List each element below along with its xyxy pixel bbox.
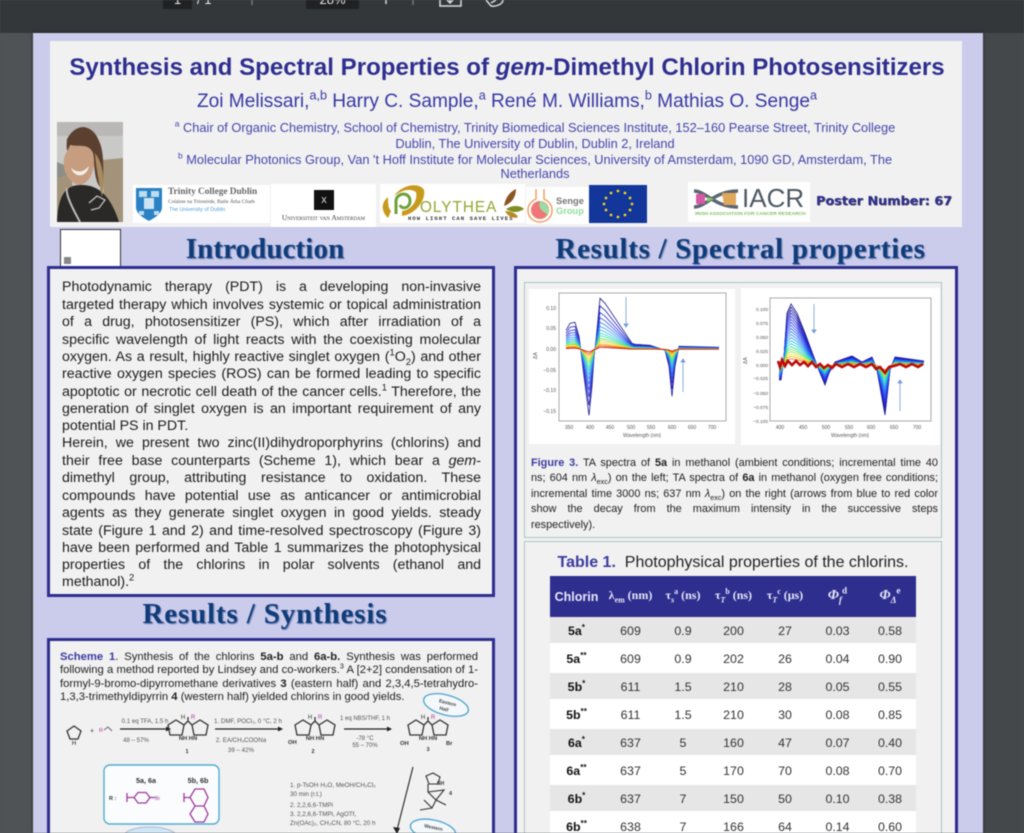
axes frame <box>770 298 931 421</box>
introduction text: Herein, we present two zinc(II)dihydroporphyrins (chlorins) and <box>62 435 481 451</box>
scheme caption: formyl-9-bromo-dipyrromethane derivatives 3 (eastern half) and 2,3,4,5-tetrahydro- <box>60 678 478 690</box>
table 1: 637 <box>620 792 641 806</box>
compound 3: 3 <box>426 747 430 753</box>
figure 3 caption: respectively). <box>531 519 595 531</box>
introduction text: specific wavelength of light reacts with the coexisting molecular <box>62 332 481 348</box>
wordmark: IACR <box>742 183 804 213</box>
y ticks <box>753 307 768 425</box>
compound 2: 2 <box>311 749 315 755</box>
introduction text: potential PS in PDT. <box>62 418 188 434</box>
table 1: 1.5 <box>674 708 692 722</box>
scheme caption <box>60 651 478 704</box>
panel: introduction <box>47 266 495 597</box>
table 1: 1.5 <box>674 680 692 694</box>
axis labels: Wavelength (nm) <box>831 433 869 439</box>
step 3 arrow: 55 – 70% <box>352 743 378 749</box>
downward arrow <box>393 767 413 833</box>
table 1: τTb (ns) <box>715 587 752 605</box>
affiliation a: a Chair of Organic Chemistry, School of Chemistry, Trinity Biomedical Sciences Institute, 152–160 Pearse Street, Trinity College <box>175 119 895 135</box>
logo: IACR <box>688 182 810 222</box>
table 1: 200 <box>723 624 744 638</box>
x ticks: 700 <box>913 425 921 431</box>
introduction text: targeted therapy which involves systemic or topical administration <box>62 297 481 313</box>
decay arrows <box>624 297 685 392</box>
reaction conditions: 2. 2,2,6,6-TMPi <box>290 802 333 809</box>
table 1: 5a* <box>568 623 585 638</box>
reaction conditions: Zn(OAc)₂, CH₃CN, 80 °C, 20 h <box>290 819 376 827</box>
table 1: 210 <box>723 680 744 694</box>
table 1: 0.40 <box>878 736 902 750</box>
compound 2: OH <box>288 740 297 746</box>
table 1: 202 <box>723 652 744 666</box>
logo: Senge Group <box>526 187 589 224</box>
compound 4: NH <box>437 781 445 787</box>
axis labels: ΔA <box>533 352 539 359</box>
table box <box>524 541 942 833</box>
western half badge <box>408 815 458 833</box>
heading: Introduction: Introduction <box>186 233 344 265</box>
introduction text: apoptotic or necrotic cell death of the cancer cells.1 Therefore, the <box>62 382 481 400</box>
pyrrole: R <box>99 728 103 734</box>
axis labels: ΔA <box>743 357 749 364</box>
crest <box>314 190 334 210</box>
table 1: 5b** <box>566 707 587 722</box>
table 1: Chlorin <box>555 590 598 604</box>
figure 3 caption <box>530 457 938 532</box>
step 2 arrow: 1. DMF, POCl₃, 0 °C, 2 h <box>214 718 283 725</box>
eastern half badge: Half <box>439 706 449 714</box>
x ticks: 700 <box>708 425 716 431</box>
y ticks: −0.100 <box>753 419 768 425</box>
title: Synthesis and Spectral Properties of gem-Dimethyl Chlorin Photosensitizers <box>69 54 945 81</box>
panel: spectral properties <box>514 266 958 833</box>
compound 1: 1 <box>185 749 189 755</box>
axis labels <box>743 357 869 439</box>
step 3 arrow <box>340 716 392 749</box>
table 1: 70 <box>778 764 792 778</box>
reaction conditions: 1. p-TsOH·H₂O, MeOH/CH₂Cl₂ <box>290 782 376 789</box>
table 1: 26 <box>778 652 792 666</box>
y ticks: 0.075 <box>756 321 768 327</box>
R substituent box: R : <box>109 796 116 802</box>
page number field <box>163 0 192 9</box>
table 1: 5b* <box>568 679 585 694</box>
table 1: 611 <box>621 680 640 694</box>
heading: Results / Synthesis: Results / Synthesis <box>142 598 387 630</box>
introduction text: Photodynamic therapy (PDT) is a developing non-invasive <box>62 279 481 295</box>
table 1: 637 <box>620 764 641 778</box>
leaves <box>503 188 524 219</box>
introduction text: agents as they generate singlet oxygen in good yields. steady <box>62 505 481 521</box>
header panel <box>50 41 962 227</box>
decay arrows <box>812 304 902 411</box>
figure 3 caption: incremental time 3000 ns; 637 nm λexc) on the right (arrows from blue to red color <box>531 488 938 502</box>
table 1: 47 <box>778 736 792 750</box>
logo: Polythea <box>380 184 525 223</box>
x ticks: 600 <box>668 425 676 431</box>
table 1: 160 <box>723 736 744 750</box>
table 1: 0.90 <box>878 652 902 666</box>
tagline: HOW LIGHT CAN SAVE LIVES <box>408 215 514 222</box>
scheme caption: Scheme 1. Synthesis of the chlorins 5a-b and 6a-b. Synthesis was performed <box>60 651 478 663</box>
y ticks: −0.050 <box>753 391 768 397</box>
x ticks: 500 <box>627 425 635 431</box>
bubble <box>124 827 176 833</box>
introduction text <box>62 279 482 590</box>
y ticks: 0.050 <box>756 335 768 341</box>
table 1: Φfd <box>828 585 847 605</box>
figure 3 box <box>524 282 942 538</box>
chart: TA spectra of 5a <box>529 289 735 444</box>
reaction conditions: 3. 2,2,6,6-TMPi, AgOTf, <box>290 811 356 818</box>
table 1: 0.08 <box>825 708 850 722</box>
scheme caption: following a method reported by Lindsey and co-workers.3 A [2+2] condensation of 1- <box>60 661 478 676</box>
logo: EU flag <box>588 184 648 224</box>
wordmark line 2: Group <box>556 206 584 216</box>
table 1: 0.10 <box>825 792 850 806</box>
chart: TA spectra of 6a <box>741 288 940 445</box>
R substituent box: 5a, 6a <box>136 776 157 785</box>
toolbar icons <box>250 0 504 8</box>
table 1: 5 <box>680 736 686 750</box>
authors: Zoi Melissari,a,b Harry C. Sample,a René M. Williams,b Mathias O. Sengea <box>197 89 817 112</box>
step 3 arrow: -78 °C <box>356 736 374 742</box>
shield <box>135 187 163 222</box>
eastern half badge: Eastern <box>438 698 457 709</box>
introduction text: generation of singlet oxygen is an important requirement of any <box>62 401 481 417</box>
viewer toolbar <box>0 0 1024 33</box>
y ticks: 0.00 <box>546 347 556 353</box>
axes frame <box>559 293 726 421</box>
table 1: 0.9 <box>674 624 692 638</box>
wordmark: Universiteit van Amsterdam <box>282 213 365 222</box>
table 1: 0.9 <box>674 652 692 666</box>
y ticks: 0.000 <box>756 363 768 369</box>
figure 3 caption: ns; 604 nm λexc) on the left; TA spectra of 6a in methanol (oxygen free conditions; <box>531 472 938 486</box>
step 2 arrow: 39 – 42% <box>228 747 255 754</box>
y ticks: −0.075 <box>753 405 768 411</box>
x ticks: 400 <box>586 425 594 431</box>
introduction text: dimethyl group, attributing resistance to oxidation. These <box>62 470 481 486</box>
introduction text: reactive oxygen species (ROS) can be formed leading to specific <box>62 366 481 382</box>
x ticks <box>776 425 921 431</box>
video placeholder box <box>60 229 121 267</box>
table 1: ΦΔe <box>880 585 900 605</box>
compound 4: 4 <box>449 791 453 797</box>
reaction conditions: 30 min (r.t.) <box>290 791 322 798</box>
table 1: 6a* <box>568 735 585 750</box>
R substituent box: 5b, 6b <box>188 776 209 785</box>
table 1: 0.03 <box>825 624 850 638</box>
pyrrole: H <box>72 741 76 747</box>
pyrrole: + <box>90 728 94 735</box>
table 1: 150 <box>723 792 744 806</box>
reaction conditions <box>290 782 376 827</box>
crest: x <box>321 194 327 206</box>
helix mark <box>693 188 739 210</box>
table 1: 609 <box>620 652 641 666</box>
x ticks: 650 <box>890 425 898 431</box>
table 1 <box>549 575 917 833</box>
x ticks <box>565 425 716 431</box>
R substituent box: Br <box>155 796 160 802</box>
figure 3 caption: show the decay from the maximum intensity in the successive steps <box>531 503 938 515</box>
x ticks: 350 <box>565 425 573 431</box>
swirl mark <box>382 184 426 218</box>
introduction text: oxygen. As a result, highly reactive singlet oxygen (1O2) and other <box>62 347 481 367</box>
table 1: 0.38 <box>878 792 902 806</box>
portrait photo <box>56 122 124 223</box>
western half badge: Western <box>424 823 443 833</box>
wordmark: OLYTHEA <box>420 199 497 216</box>
step 2 arrow: 2. EA/CH₃COONa <box>216 737 267 744</box>
y ticks: 0.025 <box>756 349 768 355</box>
scheme caption: 1,3,3-trimethyldipyrrin 4 (western half) yielded chlorins in good yields. <box>60 691 405 703</box>
table 1: 0.05 <box>825 680 850 694</box>
introduction text: state (Figure 1 and 2) and time-resolved spectroscopy (Figure 3) <box>62 523 481 539</box>
table 1: 0.07 <box>825 736 850 750</box>
step 1 arrow <box>120 718 171 744</box>
x ticks: 600 <box>867 425 875 431</box>
R substituent box <box>104 765 219 824</box>
table 1: τsa (ns) <box>666 587 700 605</box>
eastern half badge <box>421 689 471 721</box>
pyrrole <box>67 726 112 747</box>
table 1: 30 <box>778 708 792 722</box>
logo: University of Amsterdam <box>271 184 376 227</box>
table 1: 0.04 <box>825 652 850 666</box>
table 1: 5a** <box>566 651 587 666</box>
introduction text: have been performed and Table 1 summarizes the photophysical <box>62 540 481 556</box>
table 1: 611 <box>621 708 640 722</box>
panel: synthesis <box>47 638 495 833</box>
introduction text: of a drug, photosensitizer (PS), which after irradiation of a <box>62 314 481 330</box>
table title: Table 1. Photophysical properties of the chlorins. <box>558 554 908 571</box>
table 1: 0.85 <box>878 708 902 722</box>
x ticks: 500 <box>822 425 830 431</box>
logo: Trinity College Dublin <box>133 185 270 223</box>
play icon <box>64 257 71 264</box>
table 1: 6a** <box>566 763 587 778</box>
introduction text: compounds have potential use as anticancer or antimicrobial <box>62 488 481 504</box>
table 1: 0.08 <box>825 764 850 778</box>
heading: Results / Spectral properties: Results / Spectral properties <box>555 233 926 265</box>
x ticks: 450 <box>799 425 807 431</box>
y ticks: −0.05 <box>543 368 556 374</box>
table 1: λem (nm) <box>609 588 652 605</box>
axis labels <box>533 352 661 439</box>
table 1: 0.58 <box>878 624 902 638</box>
English name: The University of Dublin <box>169 207 225 213</box>
table 1: 27 <box>778 624 792 638</box>
Irish name: Coláiste na Tríonóide, Baile Átha Cliath <box>168 199 255 205</box>
compound 4 <box>420 773 453 810</box>
table 1: 0.55 <box>878 680 902 694</box>
table 1: 28 <box>778 680 792 694</box>
poster number: Poster Number: 67 <box>816 194 952 209</box>
y ticks: 0.05 <box>546 326 556 332</box>
axis labels: Wavelength (nm) <box>623 433 661 439</box>
table 1: 170 <box>723 764 744 778</box>
table 1: 7 <box>680 792 686 806</box>
compound 1 <box>168 715 208 755</box>
table 1: 50 <box>778 792 792 806</box>
table 1: 5 <box>680 764 686 778</box>
step 3 arrow: 1 eq NBS/THF, 1 h <box>340 716 390 722</box>
wordmark: Trinity College Dublin <box>168 187 257 197</box>
compound 3: OH <box>400 741 409 747</box>
figure 3 caption: Figure 3. TA spectra of 5a in methanol (ambient conditions; incremental time 40 <box>531 457 938 469</box>
table 1: 210 <box>723 708 744 722</box>
x ticks: 550 <box>845 425 853 431</box>
x ticks: 400 <box>776 425 784 431</box>
y ticks: 0.10 <box>546 306 556 312</box>
introduction text: properties of the chlorins in polar solvents (ethanol and <box>62 557 481 573</box>
y ticks: 0.100 <box>756 307 768 313</box>
affiliation a second line: Dublin, The University of Dublin, Dublin 2, Ireland <box>395 136 675 151</box>
wordmark: Senge <box>556 196 584 206</box>
y ticks: −0.10 <box>543 388 556 394</box>
synthesis scheme <box>66 692 470 833</box>
introduction text: their free base counterparts (Scheme 1), which bear a gem- <box>62 453 481 469</box>
wordmark subtitle: IRISH ASSOCIATION FOR CANCER RESEARCH <box>695 212 806 217</box>
introduction text: methanol).2 <box>62 572 134 590</box>
curves <box>566 298 719 415</box>
table 1: 609 <box>620 624 641 638</box>
affiliation b second line: Netherlands <box>500 166 570 181</box>
compound 3: Br <box>446 741 453 747</box>
step 2 arrow <box>214 718 283 754</box>
step 1 arrow: 0.1 eq TFA, 1.5 h <box>122 718 168 725</box>
right viewer gutter <box>983 33 1024 833</box>
y ticks: −0.025 <box>753 376 768 382</box>
x ticks: 550 <box>647 425 655 431</box>
x ticks: 650 <box>688 425 696 431</box>
affiliation b: b Molecular Photonics Group, Van 't Hoff Institute for Molecular Sciences, University of Amsterdam, 1090 GD, Amsterdam, The <box>178 151 892 167</box>
y ticks: −0.15 <box>543 409 556 415</box>
x ticks: 450 <box>606 425 614 431</box>
table 1: 6b* <box>568 791 585 806</box>
table 1: τTc (μs) <box>767 587 803 605</box>
compound 3 <box>400 715 453 753</box>
y ticks <box>543 306 556 415</box>
table 1: 637 <box>620 736 641 750</box>
flask <box>526 188 554 224</box>
table 1: 0.70 <box>878 764 902 778</box>
compound 2 <box>288 715 335 755</box>
step 1 arrow: 48 – 57% <box>123 737 149 744</box>
zoom field <box>306 0 359 9</box>
curves <box>778 304 924 415</box>
